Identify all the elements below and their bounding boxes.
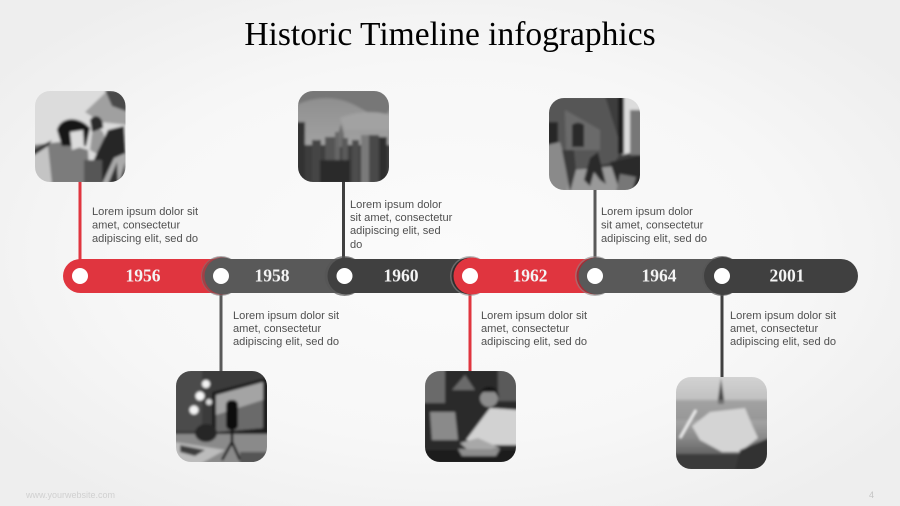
- node: 1958: [201, 256, 232, 296]
- text: 1958: amet, consectetur: [233, 323, 321, 335]
- segment: 1962: [470, 259, 595, 293]
- year: 1960: 1960: [384, 266, 419, 286]
- node: 1962: [450, 256, 492, 296]
- text: 1958: Lorem ipsum dolor sit: [233, 310, 339, 322]
- photo: people in crowd: [33, 89, 128, 184]
- connector: 2001: [720, 292, 724, 378]
- connector: 1956: [78, 181, 82, 260]
- year: 1956: 1956: [126, 266, 161, 286]
- photo: street scene: [547, 96, 642, 192]
- photo: man at computer: [423, 369, 518, 464]
- year: 1964: 1964: [642, 266, 677, 286]
- text: 2001: adipiscing elit, sed do: [730, 336, 836, 348]
- segment: 1960: [344, 259, 470, 293]
- footer: page number: 4: [869, 490, 874, 500]
- photo: handshake over city: [674, 375, 769, 471]
- text: 1960: sit amet, consectetur: [350, 212, 453, 224]
- text: 1964: Lorem ipsum dolor: [601, 206, 693, 218]
- node: 1960: [324, 256, 366, 296]
- footer: website: www.yourwebsite.com: [25, 490, 115, 500]
- photo: microphone desk: [174, 369, 269, 464]
- segment: 1964: [595, 259, 722, 293]
- text: 1960: do: [350, 239, 362, 251]
- title: Historic Timeline infographics: [244, 16, 656, 53]
- text: 1956: amet, consectetur: [92, 220, 180, 232]
- timeline bar: [63, 256, 858, 296]
- node: 1964: [575, 256, 617, 296]
- connector: 1958: [220, 292, 222, 372]
- year: 2001: 2001: [770, 266, 804, 286]
- connector: 1962: [468, 292, 472, 372]
- text: 1956: adipiscing elit, sed do: [92, 233, 198, 245]
- text: 1960: adipiscing elit, sed: [350, 225, 441, 237]
- connector: 1964: [594, 189, 596, 260]
- text: 1962: adipiscing elit, sed do: [481, 336, 587, 348]
- text: 1964: adipiscing elit, sed do: [601, 233, 707, 245]
- text: 1962: amet, consectetur: [481, 323, 569, 335]
- photo: city skyline: [296, 89, 391, 184]
- text: 1956: Lorem ipsum dolor sit: [92, 206, 198, 218]
- text: 1962: Lorem ipsum dolor sit: [481, 310, 587, 322]
- year: 1958: 1958: [254, 266, 290, 286]
- text: 1964: sit amet, consectetur: [601, 220, 704, 232]
- node: 2001: [702, 256, 743, 296]
- year: 1962: 1962: [512, 266, 548, 286]
- text: 1960: Lorem ipsum dolor: [350, 199, 442, 211]
- segment: 2001: [722, 259, 858, 293]
- text: 1958: adipiscing elit, sed do: [233, 336, 339, 348]
- text: 2001: Lorem ipsum dolor sit: [730, 310, 836, 322]
- node: 1956: [72, 268, 88, 284]
- segment: 1958: [221, 259, 344, 293]
- connector: 1960: [342, 181, 345, 260]
- segment: 1956: [63, 259, 221, 293]
- text: 2001: amet, consectetur: [730, 323, 818, 335]
